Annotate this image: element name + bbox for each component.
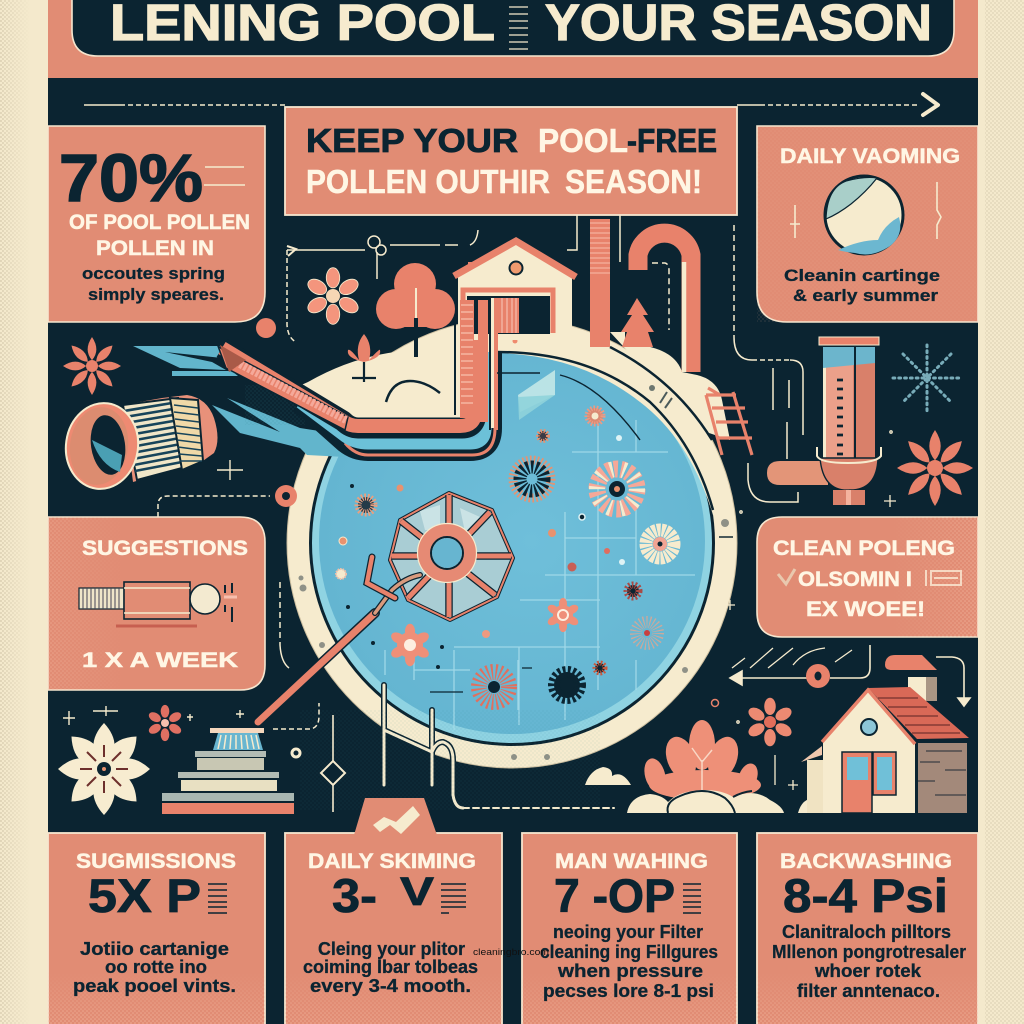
panel: backwashing: whoer rotek [814,961,922,981]
panel: backwashing: Clanitraloch pilltors [782,922,951,942]
daisy [597,469,637,509]
panel: daily skimming: DAILY SKIMING [308,850,476,873]
connector node [806,664,830,688]
icon: filter ball [790,176,941,254]
panel: manual washing: when pressure [557,961,703,981]
icon: filter cylinder [60,395,218,494]
panel: daily skimming: V [400,870,434,914]
pool rim [287,318,737,768]
water sail glare [518,370,555,412]
icon: round tree [376,263,455,357]
panel: manual washing: 7 -OP [554,869,675,922]
rim marks [512,338,672,408]
panel: backwashing [757,833,978,1024]
icon: house [801,655,969,813]
panel: manual washing: neoing your Filter [553,922,703,942]
panel: headline: SEASON! [565,163,702,200]
panel: submissions: Jotiio cartanige [80,939,229,959]
panel: daily skimming: Cleing your plitor [318,939,465,959]
pipe nozzle [218,345,348,430]
panel: daily vacuuming [757,126,978,322]
small ring [712,700,718,706]
glow pollen [636,622,658,644]
icon: flower lower right [746,698,794,746]
panel: 70 percent stat: occoutes spring [82,265,225,283]
panel: submissions: SUGMISSIONS [76,850,236,873]
panel: suggestions: 1 X A WEEK [82,649,238,672]
icon: snowflake dots [893,345,961,412]
panel: daily skimming: 3- [332,869,377,922]
panel: 70 percent stat: simply speares. [88,286,224,304]
icon: skimmer wheel [390,493,513,620]
panel: daily vacuuming: & early summer [793,286,938,305]
panel: manual washing: cleaning ing Fillgures [540,942,718,962]
small salmon dot [256,318,276,338]
panel: manual washing: pecses lore 8-1 psi [543,981,714,1001]
salmon connector node [275,485,297,507]
left dashed connectors [158,496,319,729]
panel: clean pollen [757,517,978,637]
panel: daily vacuuming: Cleanin cartinge [784,266,940,285]
panel: daily vacuuming: DAILY VAOMING [780,145,960,168]
water specks [346,484,444,669]
panel: daily skimming [285,833,502,1024]
panel: submissions: oo rotte ino [105,957,207,977]
right hill [610,332,730,440]
panel: headline: POOL [538,122,628,159]
icon: flower right [897,430,973,506]
panel: backwashing: BACKWASHING [780,850,952,873]
pollen burst [513,460,551,498]
pipe channel with water [222,262,495,455]
stat caption: OF POOL POLLEN [69,211,250,234]
pool grid lines [385,420,695,730]
panel: submissions: peak pooel vints. [73,976,236,996]
panel: daily skimming: every 3-4 mooth. [310,976,471,996]
panel: clean pollen: CLEAN POLENG [773,537,955,560]
icon: bush [641,720,761,800]
panel: submissions [48,833,265,1024]
icon: pool steps [384,685,614,808]
panel: backwashing: 8-4 Psi [783,869,948,922]
panel: headline: KEEP YOUR [306,122,518,159]
sparkles left [63,460,244,725]
panel: backwashing: Mllenon pongrotresaler [772,942,966,962]
icon: ladder right [706,388,752,455]
panel: backwashing: filter anntenaco. [797,981,940,1001]
panel: daily skimming: coiming lbar tolbeas [303,957,478,977]
panel: headline [285,107,737,215]
pool pollen [336,370,674,702]
stat number: 70% [59,141,203,216]
tab icon above panel [354,798,437,835]
pool [287,318,737,768]
panel: submissions: 5X P [88,869,201,922]
hill arch [386,381,440,402]
panel: suggestions: SUGGESTIONS [82,537,248,560]
icon: large cream flower [58,723,150,815]
panel: clean pollen: EX WOEE! [806,598,925,621]
icon: tall salmon pipe [590,219,610,347]
salmon blossoms [546,598,580,632]
clouds [585,767,823,813]
cream hill behind pipe [290,333,497,425]
icon: small plant [348,334,380,382]
watermark: cleaningbro.com [473,947,549,958]
panel: 70 percent stat: POLLEN IN [96,237,214,260]
spray streaks [133,346,345,457]
connector lines upper [287,215,803,502]
panel: manual washing: MAN WAHING [555,850,708,873]
panel: headline: POLLEN OUTHIR [306,163,550,200]
tank arm [767,461,828,485]
icon: flower by shed [305,268,361,324]
red spiky pollen [479,672,509,702]
right sparkles [725,431,896,790]
icon: skimmer pole [258,557,420,722]
lower right connector [730,645,970,706]
icon: brush and stacked slabs [162,728,294,814]
icon: flower upper left [63,337,121,395]
pool top rim [497,332,730,515]
spray dots texture [245,385,305,425]
icon: curved pipe [638,233,691,372]
icon: small salmon blossom [147,705,183,741]
small pollen [587,408,603,424]
panel: suggestions [48,517,265,690]
panel: 70 percent stat [48,126,265,322]
panel: manual washing [522,833,737,1024]
panel: headline: -FREE [627,122,717,159]
cream daisy [646,530,674,558]
dark dotted pollen [554,672,580,698]
shed [454,240,576,430]
water [319,348,705,734]
rim rivets [298,519,729,760]
icon: filter bolt [79,582,237,626]
header band [48,0,978,78]
icon: pine tree [621,298,654,347]
title [110,0,932,51]
icon: filter tank [767,337,881,505]
title box [72,0,954,56]
top arc outline [497,347,713,510]
panel: clean pollen: OLSOMIN I [798,568,912,591]
star and ornaments lower [292,710,600,812]
top dashed arrow [84,94,938,115]
